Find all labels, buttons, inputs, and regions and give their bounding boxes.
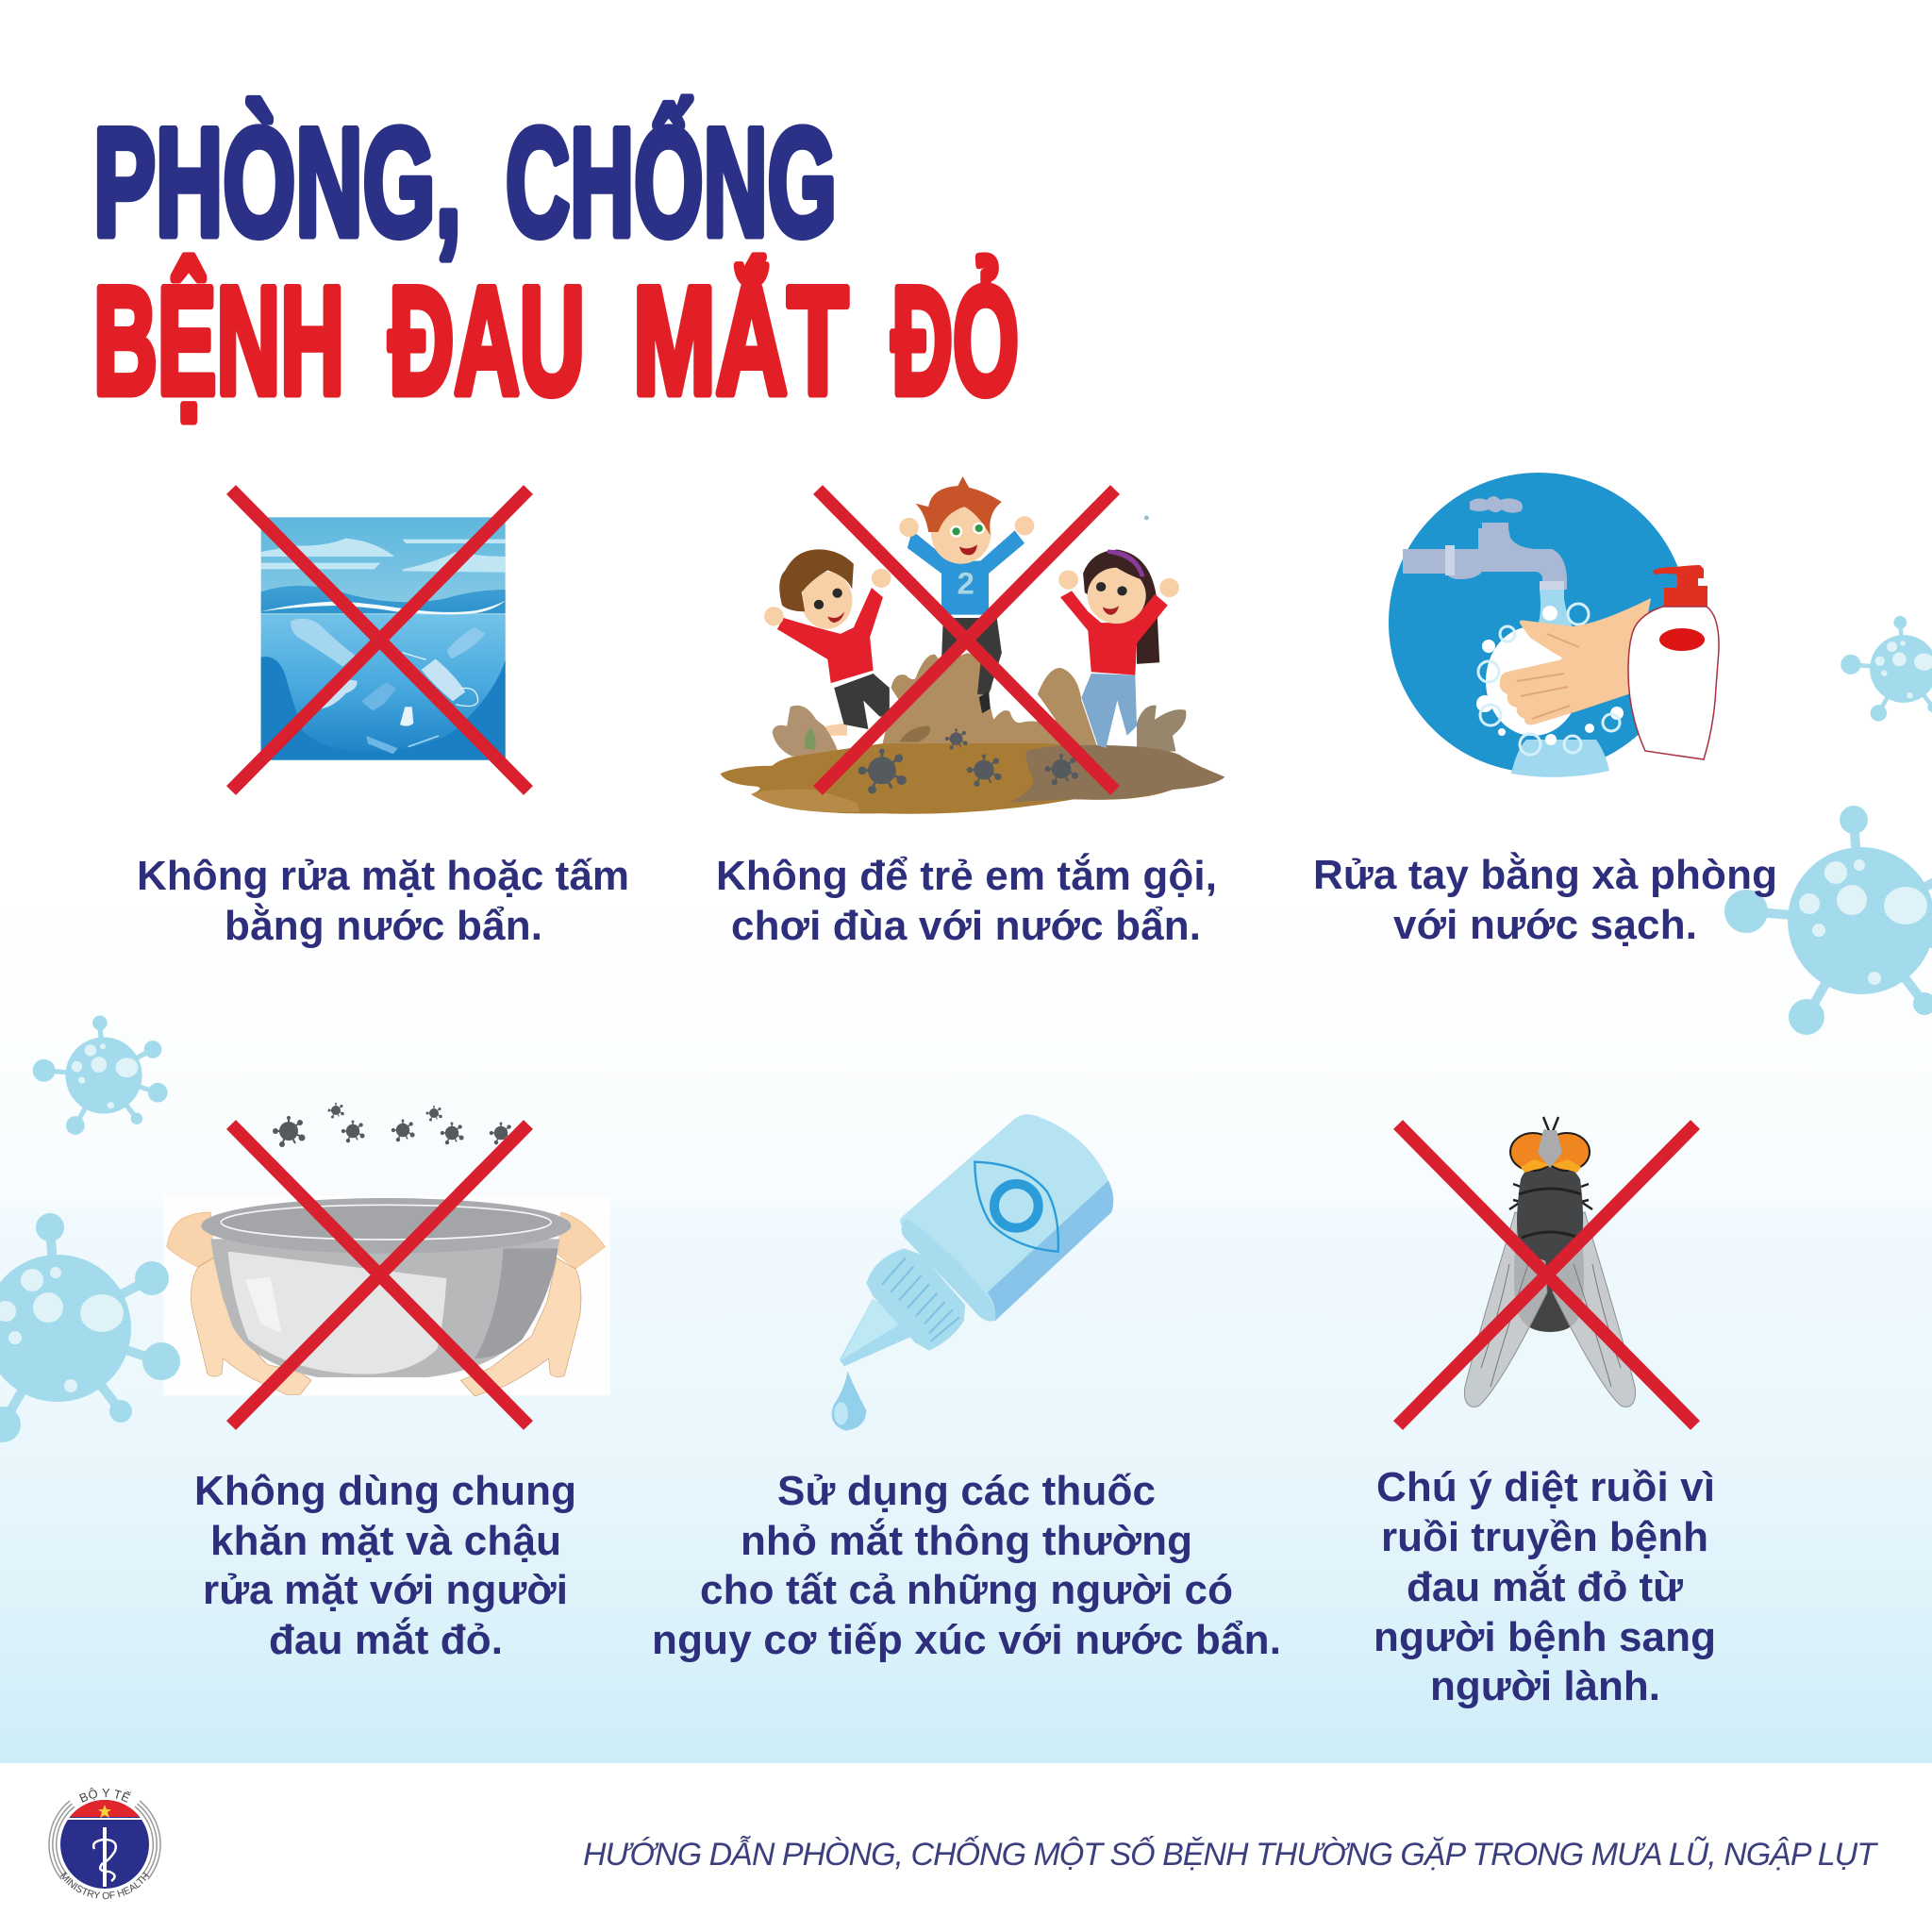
title line 1: PHÒNG,: [93, 97, 461, 268]
caption: [194, 1468, 576, 1663]
red cross: [818, 490, 1115, 791]
caption: Rửa tay bằng xà phòng: [1313, 851, 1777, 898]
icon: hand washing with soap: [1389, 473, 1719, 777]
red cross: [1398, 1124, 1695, 1425]
red cross: [231, 490, 528, 791]
title line 2: ĐAU: [389, 256, 585, 426]
icon: children playing in muddy puddle: [720, 476, 1224, 814]
caption: chơi đùa với nước bẩn.: [731, 903, 1201, 949]
caption: bằng nước bẩn.: [225, 902, 542, 949]
title line 2: MẮT: [633, 256, 848, 426]
logo: Ministry of Health: MINISTRY OF HEALTH: [60, 1872, 149, 1900]
footer band: [0, 1763, 1932, 1900]
logo: Ministry of Health: BỘ Y TẾ: [79, 1788, 132, 1803]
title line 1: CHỐNG: [506, 97, 837, 268]
panel: eye drops: [652, 1114, 1281, 1663]
caption: Chú ý diệt ruồi vì: [1376, 1464, 1715, 1510]
caption: đau mắt đỏ.: [269, 1616, 503, 1663]
caption: [137, 853, 629, 949]
caption: với nước sạch.: [1393, 902, 1697, 948]
panel: wash hands: [1313, 473, 1777, 948]
icon: eye drop bottle: [832, 1114, 1113, 1431]
title line 2: BỆNH: [93, 256, 344, 426]
caption: [1313, 851, 1777, 948]
caption: Không rửa mặt hoặc tấm: [137, 853, 629, 899]
caption: khăn mặt và chậu: [210, 1518, 561, 1564]
panel: shared towel and basin: [163, 1103, 610, 1663]
caption: người bệnh sang: [1374, 1614, 1716, 1660]
virus: large right: [1724, 806, 1932, 1035]
icon: fly: [1464, 1117, 1636, 1407]
caption: người lành.: [1430, 1663, 1660, 1709]
boy centre: [899, 476, 1034, 713]
panel: dirty water: [137, 490, 629, 949]
title line 2: ĐỎ: [891, 256, 1019, 426]
virus: small left: [33, 1016, 168, 1135]
panel: children in dirty water: [716, 476, 1224, 949]
boy left legs: [823, 674, 890, 736]
soap bottle: [1628, 565, 1719, 759]
caption: Không dùng chung: [194, 1468, 576, 1514]
caption: rửa mặt với người: [203, 1567, 568, 1613]
splashes: [773, 653, 1186, 757]
caption: [652, 1468, 1281, 1663]
caption: nguy cơ tiếp xúc với nước bẩn.: [652, 1617, 1281, 1663]
boy centre: 2: [958, 567, 974, 601]
germs above basin: [273, 1103, 513, 1147]
virus: top right: [1840, 616, 1932, 722]
icon: basin held by hands: [163, 1195, 610, 1396]
footer text: HƯỚNG DẪN PHÒNG, CHỐNG MỘT SỐ BỆNH THƯỜNG GẶP TRONG MƯA LŨ, NGẬP LỤT: [583, 1836, 1878, 1873]
caption: cho tất cả những người có: [700, 1567, 1233, 1613]
caption: [1374, 1464, 1716, 1709]
icon: polluted water: [261, 517, 506, 760]
caption: [716, 852, 1217, 949]
title line 2: [93, 256, 1019, 426]
caption: nhỏ mắt thông thường: [741, 1517, 1192, 1564]
boy left: [764, 549, 891, 683]
girl: [1058, 516, 1179, 748]
panel: kill flies: [1374, 1117, 1716, 1709]
caption: Sử dụng các thuốc: [777, 1468, 1156, 1514]
caption: ruồi truyền bệnh: [1381, 1514, 1708, 1560]
logo: Ministry of Health: [48, 1788, 161, 1900]
caption: Không để trẻ em tắm gội,: [716, 852, 1217, 899]
virus: large left: [0, 1213, 180, 1442]
red cross: [231, 1124, 528, 1425]
puddle: [720, 728, 1224, 814]
title: [93, 97, 1019, 426]
caption: đau mắt đỏ từ: [1407, 1563, 1683, 1610]
